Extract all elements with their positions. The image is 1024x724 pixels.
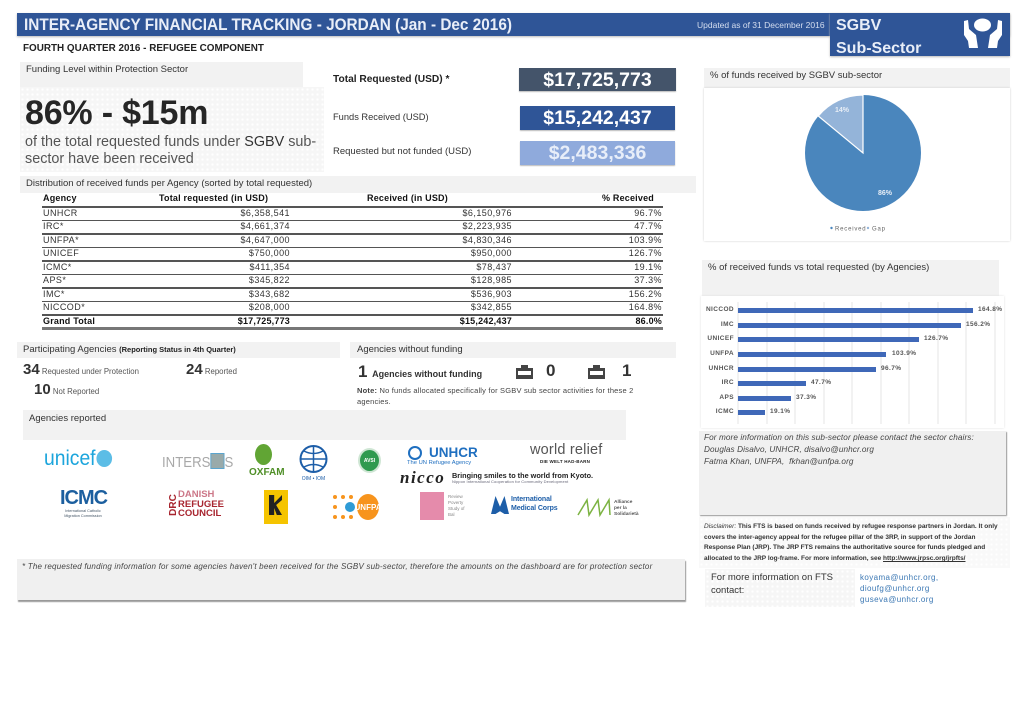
table: funds per agency: 103.9% — [629, 235, 662, 245]
bar chart — [706, 302, 1002, 424]
disclaimer text: allocated to the JRP log-frame. For more information, see http://www.jrpsc.org/jrpfts/ — [704, 555, 965, 562]
logo: AVSI — [358, 448, 381, 473]
contact block background and emails: dioufg@unhcr.org — [860, 584, 930, 593]
logo: nicco: Nippon International Cooperation for Community Development — [452, 479, 568, 484]
bar chart: 37.3% — [796, 394, 816, 400]
stat: not funded — [520, 141, 675, 165]
table: funds per agency: $536,903 — [471, 288, 512, 298]
logo: UNHCR: UNHCR — [429, 445, 478, 460]
logo: world relief: DIE WELT HAD-BARN — [540, 459, 590, 464]
contact label — [711, 572, 833, 596]
sector badge — [830, 13, 1010, 56]
stat: total requested — [519, 68, 676, 91]
panel: FTS contact — [705, 569, 1010, 607]
contact text: Douglas Disalvo, UNHCR, disalvo@unhcr.org — [704, 445, 874, 454]
funding description: of the total requested funds under SGBV sub- — [25, 134, 316, 150]
note — [357, 386, 634, 406]
big number: 86% - $15m — [25, 94, 208, 132]
table: funds per agency: 164.8% — [629, 302, 662, 312]
bar chart: UNICEF — [707, 335, 734, 342]
panel: sector contact — [699, 431, 1006, 515]
funding description: sector have been received — [25, 151, 194, 167]
logo: International Medical Corps — [491, 496, 558, 514]
table: funds per agency: $15,242,437 — [460, 316, 512, 326]
logo: International Medical Corps: Medical Corps — [511, 504, 558, 512]
note: agencies. — [357, 397, 391, 406]
table: funds per agency: $128,985 — [471, 275, 512, 285]
title: INTER-AGENCY FINANCIAL TRACKING - JORDAN (Jan - Dec 2016) — [24, 16, 512, 34]
contact text — [704, 433, 974, 466]
logo: IOM — [300, 445, 328, 482]
pie chart: Received — [835, 226, 866, 232]
logo: pink report: Study of — [448, 506, 465, 511]
panel: disclaimer — [699, 517, 1010, 568]
table: funds per agency: Received (in USD) — [367, 193, 448, 203]
disclaimer text — [704, 523, 998, 562]
table: funds per agency: $6,358,541 — [240, 208, 290, 218]
logo: ICMC: ICMC — [60, 487, 107, 509]
bar chart: IMC — [721, 320, 734, 328]
sector name — [836, 17, 922, 57]
icon: UN building — [588, 365, 605, 379]
count: requested: 34 Requested under Protection — [23, 361, 139, 378]
pie chart — [805, 95, 921, 232]
table: funds per agency: $343,682 — [249, 288, 290, 298]
table: funds per agency: NICCOD* — [43, 302, 85, 312]
bar chart: 96.7% — [881, 364, 901, 372]
table: funds per agency: $2,223,935 — [462, 221, 512, 231]
contact text: Fatma Khan, UNFPA, fkhan@unfpa.org — [704, 457, 854, 466]
panel: participating agencies heading — [17, 342, 340, 358]
table: funds per agency: 19.1% — [634, 262, 662, 272]
table: funds per agency — [42, 193, 663, 330]
logo: International Medical Corps: International — [511, 496, 552, 503]
contact label: contact: — [711, 584, 744, 596]
disclaimer text: Response Plan (JRP). The JRP FTS remains the authoritative source for funds pledged and — [704, 544, 985, 551]
logo: oxfam: OXFAM — [249, 467, 285, 478]
table: funds per agency: IRC* — [43, 221, 64, 231]
logo: unicef: unicef — [44, 447, 96, 470]
logo: alliance: per la — [614, 505, 627, 511]
table: funds per agency: 126.7% — [629, 248, 662, 258]
logo: ICMC: International Catholic Migration Commission — [64, 509, 102, 518]
logo: Danish Refugee Council — [168, 489, 224, 519]
logo: nicco: nicco — [400, 468, 445, 487]
table: funds per agency: IMC* — [43, 288, 65, 298]
label: not funded: Requested but not funded (USD) — [333, 146, 471, 157]
bar chart: UNHCR — [709, 364, 734, 372]
footnote text: * The requested funding information for some agencies haven't been received for the SGBV sub-sector, therefore the amounts on the dashboard are for protection sector — [22, 562, 652, 571]
table: funds per agency: Agency — [43, 193, 77, 203]
table: funds per agency: APS* — [43, 275, 66, 285]
logo: nicco: Bringing smiles to the world from Kyoto. — [452, 471, 593, 480]
logo: AVSI: AVSI — [364, 458, 375, 464]
logo: Danish Refugee Council: DRC — [168, 494, 179, 516]
count: reported: 24 Reported — [186, 361, 237, 378]
bar chart: 164.8% — [978, 306, 1002, 313]
stat: funds received — [520, 106, 675, 130]
logo: IRC — [264, 490, 288, 524]
logo: nicco — [400, 468, 593, 487]
agency logos — [44, 442, 639, 524]
pie chart: 86% — [878, 190, 893, 197]
table: funds per agency: $4,830,346 — [462, 235, 512, 245]
table: funds per agency: $345,822 — [249, 275, 290, 285]
table: funds per agency: $950,000 — [471, 248, 512, 258]
panel: bar chart — [701, 296, 1004, 428]
heading text: % of funds received by SGBV sub-sector — [710, 70, 882, 81]
stat: funds received: $15,242,437 — [543, 107, 652, 129]
logo: world relief: world relief — [530, 442, 603, 458]
contact label: For more information on FTS — [711, 572, 833, 583]
disclaimer text: Disclaimer: This FTS is based on funds received by refugee response partners in Jordan. It only — [704, 523, 998, 530]
logo: Danish Refugee Council: COUNCIL — [178, 508, 221, 519]
panel: agencies without funding heading — [350, 342, 676, 358]
icon: NGO building — [516, 365, 533, 379]
logo: alliance: Solidarietà — [614, 511, 639, 517]
panel: funding level — [20, 87, 324, 172]
logo: UNHCR: The UN Refugee Agency — [407, 460, 471, 466]
logo: pink report: Poverty — [448, 500, 463, 505]
logo: pink report: Bal — [448, 512, 455, 517]
table: funds per agency: 96.7% — [634, 208, 662, 218]
table: funds per agency: 37.3% — [634, 275, 662, 285]
count: agencies without funding: 1 Agencies without funding — [358, 362, 482, 381]
pie chart: 14% — [835, 107, 850, 114]
panel: bar chart heading — [702, 260, 999, 296]
contact text: For more information on this sub-sector please contact the sector chairs: — [704, 433, 974, 442]
table: funds per agency: $4,647,000 — [240, 235, 290, 245]
table: funds per agency: $17,725,773 — [238, 316, 290, 326]
table: funds per agency: 86.0% — [635, 316, 662, 326]
sector name: SGBV — [836, 17, 881, 34]
table: funds per agency: $411,354 — [250, 262, 290, 272]
table: funds per agency: UNHCR — [43, 208, 78, 218]
footnote panel — [17, 559, 685, 600]
icon: hands holding person — [964, 18, 1002, 48]
contact block background and emails: guseva@unhcr.org — [860, 595, 934, 604]
logo: UNFPA — [333, 494, 382, 520]
label: total requested: Total Requested (USD) * — [333, 74, 449, 85]
panel: distribution table heading — [20, 176, 696, 193]
stat: total requested: $17,725,773 — [543, 69, 652, 91]
bar chart: ICMC — [716, 408, 734, 415]
note: Note: No funds allocated specifically for SGBV sub sector activities for these 2 — [357, 386, 634, 395]
heading text: Agencies without funding — [357, 344, 463, 355]
bar chart: UNFPA — [710, 350, 734, 356]
logo: UNFPA: UNFPA — [355, 503, 382, 512]
heading text: Distribution of received funds per Agency (sorted by total requested) — [26, 178, 312, 189]
bar chart: NICCOD — [706, 306, 734, 313]
table: funds per agency: $208,000 — [249, 302, 290, 312]
table: funds per agency: UNFPA* — [43, 235, 79, 245]
bar chart: IRC — [722, 379, 734, 386]
bar chart: 47.7% — [811, 379, 831, 386]
panel: pie heading — [704, 68, 1010, 88]
table: funds per agency: ICMC* — [43, 262, 72, 272]
label: funds received: Funds Received (USD) — [333, 112, 429, 122]
table: funds per agency: $750,000 — [249, 248, 290, 258]
update date: Updated as of 31 December 2016 — [697, 20, 825, 30]
panel: agencies without funding — [357, 361, 634, 406]
heading text: Agencies reported — [29, 413, 106, 424]
subtitle: FOURTH QUARTER 2016 - REFUGEE COMPONENT — [23, 43, 264, 54]
count: NGO: 0 — [546, 361, 555, 380]
bar chart: 19.1% — [770, 408, 790, 415]
panel: agencies reported heading — [23, 410, 626, 440]
heading text: % of received funds vs total requested (by Agencies) — [708, 262, 929, 273]
table: funds per agency: UNICEF — [43, 248, 79, 258]
sector name: Sub-Sector — [836, 40, 921, 57]
bar chart: 156.2% — [966, 320, 990, 328]
pie chart: Gap — [872, 226, 886, 232]
count: not reported: 10 Not Reported — [34, 381, 99, 398]
logo: UNHCR — [407, 445, 478, 466]
logo: pink report: Review — [448, 494, 463, 499]
bar chart: APS — [719, 394, 734, 400]
table: funds per agency: $6,150,976 — [462, 208, 512, 218]
contact block background and emails: koyama@unhcr.org, — [860, 573, 939, 582]
table: funds per agency: 156.2% — [629, 288, 662, 298]
count: UN: 1 — [622, 361, 631, 380]
logo: oxfam — [249, 444, 285, 478]
funding description — [25, 134, 316, 167]
logo: IOM: OIM • IOM — [302, 476, 325, 482]
table: funds per agency: Grand Total — [43, 316, 95, 326]
logo: Danish Refugee Council: DANISH — [178, 489, 214, 500]
table: funds per agency: $4,661,374 — [240, 221, 290, 231]
contact block background and emails — [855, 569, 1010, 607]
table: funds per agency: 47.7% — [634, 221, 662, 231]
table: funds per agency: $78,437 — [476, 262, 512, 272]
logo: pink report — [420, 492, 465, 520]
bar chart: 103.9% — [892, 350, 916, 356]
heading text: Funding Level within Protection Sector — [26, 64, 188, 75]
title banner — [17, 13, 1010, 36]
logo: alliance: Alliance — [614, 499, 633, 505]
logo: alliance — [577, 498, 639, 518]
logo: Danish Refugee Council: REFUGEE — [178, 498, 224, 510]
bar chart: 126.7% — [924, 335, 948, 342]
stat: not funded: $2,483,336 — [549, 142, 646, 164]
heading text: Participating Agencies (Reporting Status in 4th Quarter) — [23, 344, 236, 355]
table: funds per agency: Total requested (in USD) — [159, 193, 268, 203]
logo: intersos: INTERS S — [162, 454, 233, 471]
panel: pie chart — [704, 88, 1010, 241]
disclaimer text: covers the inter-agency appeal for the refugee pillar of the 3RP, in support of the Jordan — [704, 534, 976, 541]
panel: participating agency counts — [23, 361, 237, 398]
panel: funding level heading — [20, 62, 303, 88]
table: funds per agency: $342,855 — [471, 302, 512, 312]
table: funds per agency: % Received — [602, 193, 654, 203]
